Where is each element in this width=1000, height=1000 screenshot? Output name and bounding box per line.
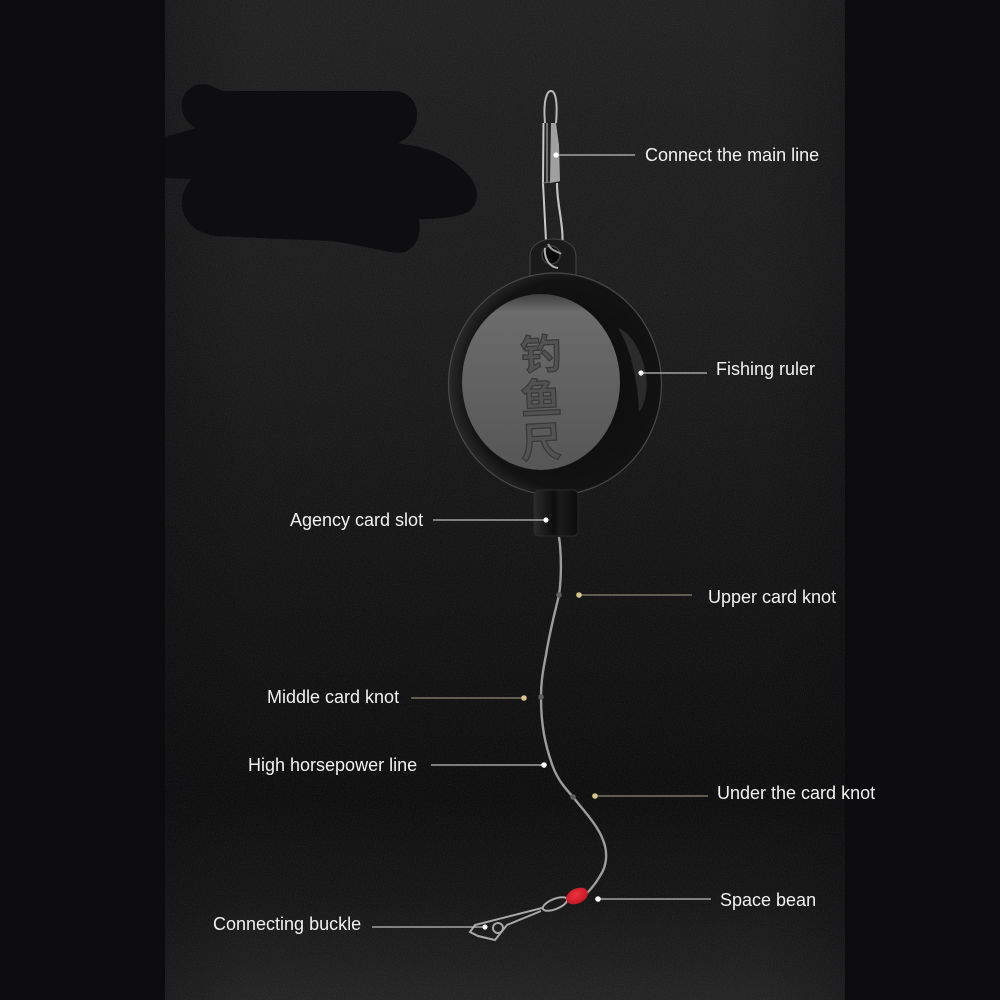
callout: Middle card knot: Middle card knot [267,687,399,707]
callout: Fishing ruler [638,359,815,379]
callout: Under the card knot [592,783,875,803]
callout: Middle card knot [267,687,527,707]
stamped characters: 尺 [519,419,563,467]
stamped characters: 钓 [519,331,563,379]
bottom cylinder [534,490,578,536]
callout: Upper card knot [576,587,836,607]
background panel [165,0,845,1000]
callout: Fishing ruler: Fishing ruler [716,359,815,379]
callout: Connecting buckle [213,914,488,934]
icon: red space bean [563,884,591,908]
callout: Agency card slot: Agency card slot [290,510,423,530]
callout: Connecting buckle: Connecting buckle [213,914,361,934]
glossy highlight [618,328,647,412]
callout: High horsepower line: High horsepower line [248,755,417,775]
callout: Space bean: Space bean [720,890,816,910]
icon: connecting buckle [470,894,570,940]
stamped characters: 鱼 [519,375,563,423]
hanging lug [530,239,576,280]
stamped characters [519,331,563,467]
fishing line [538,537,606,893]
redacted dark blot [165,84,477,253]
lug hole and ring [542,244,561,268]
knots [538,592,576,800]
callout: Connect the main line [553,145,819,165]
icon: snap swivel clip at top [543,91,563,241]
callout: Upper card knot: Upper card knot [708,587,836,607]
callout: Agency card slot [290,510,549,530]
grey face plate [462,294,620,470]
product: round fishing ruler body [448,239,662,536]
outer shell [448,273,662,495]
callout: Connect the main line: Connect the main line [645,145,819,165]
callout: Space bean [595,890,816,910]
callout: Under the card knot: Under the card knot [717,783,875,803]
callout: High horsepower line [248,755,547,775]
